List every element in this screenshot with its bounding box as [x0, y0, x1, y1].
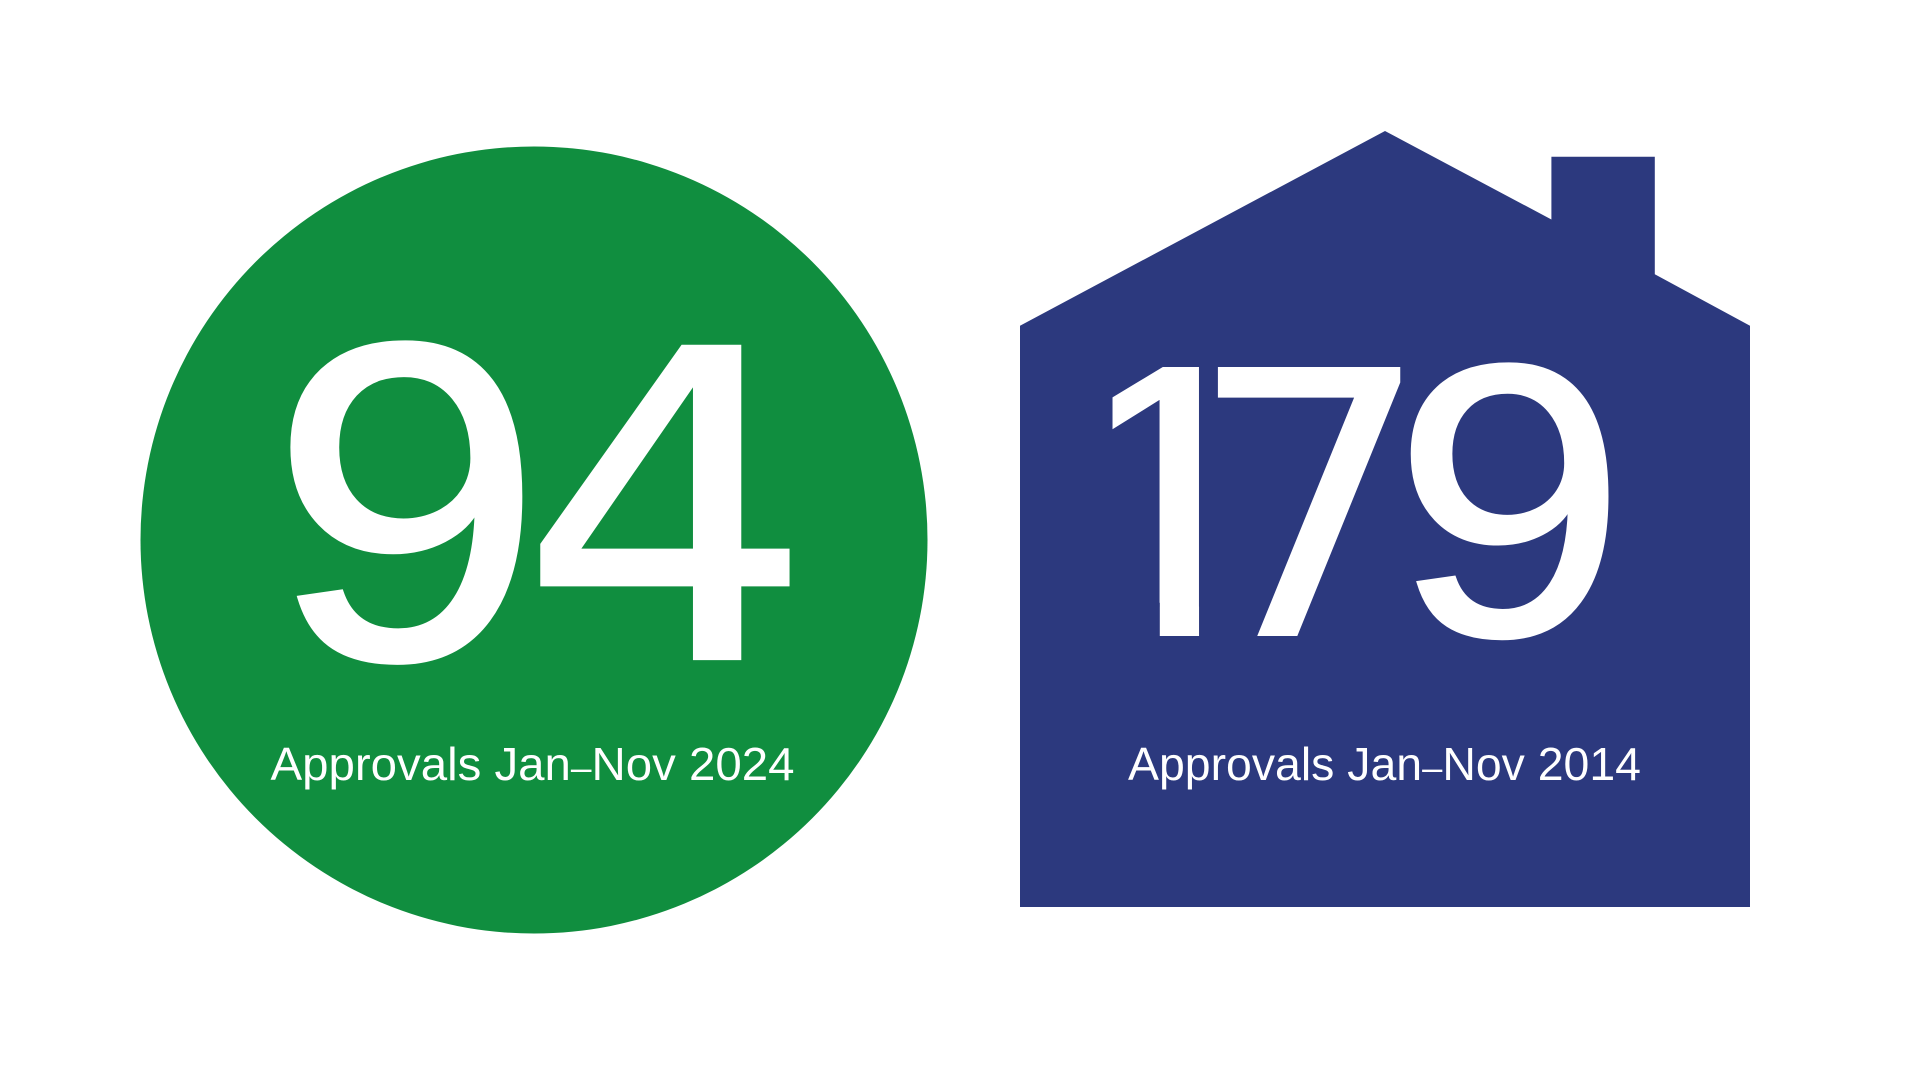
green circle background [140, 146, 928, 934]
big number 94: 4 [519, 261, 814, 761]
big number 179: 7 [1186, 294, 1433, 724]
caption 2014: Approvals Jan–Nov 2014 [1128, 738, 1641, 790]
big number 179: 1 [1047, 282, 1295, 719]
big number 94 [270, 250, 814, 761]
infographic: approvals comparison [140, 131, 1750, 934]
panel: 2014 approvals house [1020, 131, 1750, 907]
big number 179 [1112, 362, 1608, 640]
caption 2024: Approvals Jan–Nov 2024 [270, 738, 794, 790]
big number 94: 9 [270, 250, 543, 755]
navy house shape with chimney [1020, 131, 1750, 907]
big number 179: 9 [1393, 285, 1626, 717]
panel: 2024 approvals circle [140, 146, 928, 934]
